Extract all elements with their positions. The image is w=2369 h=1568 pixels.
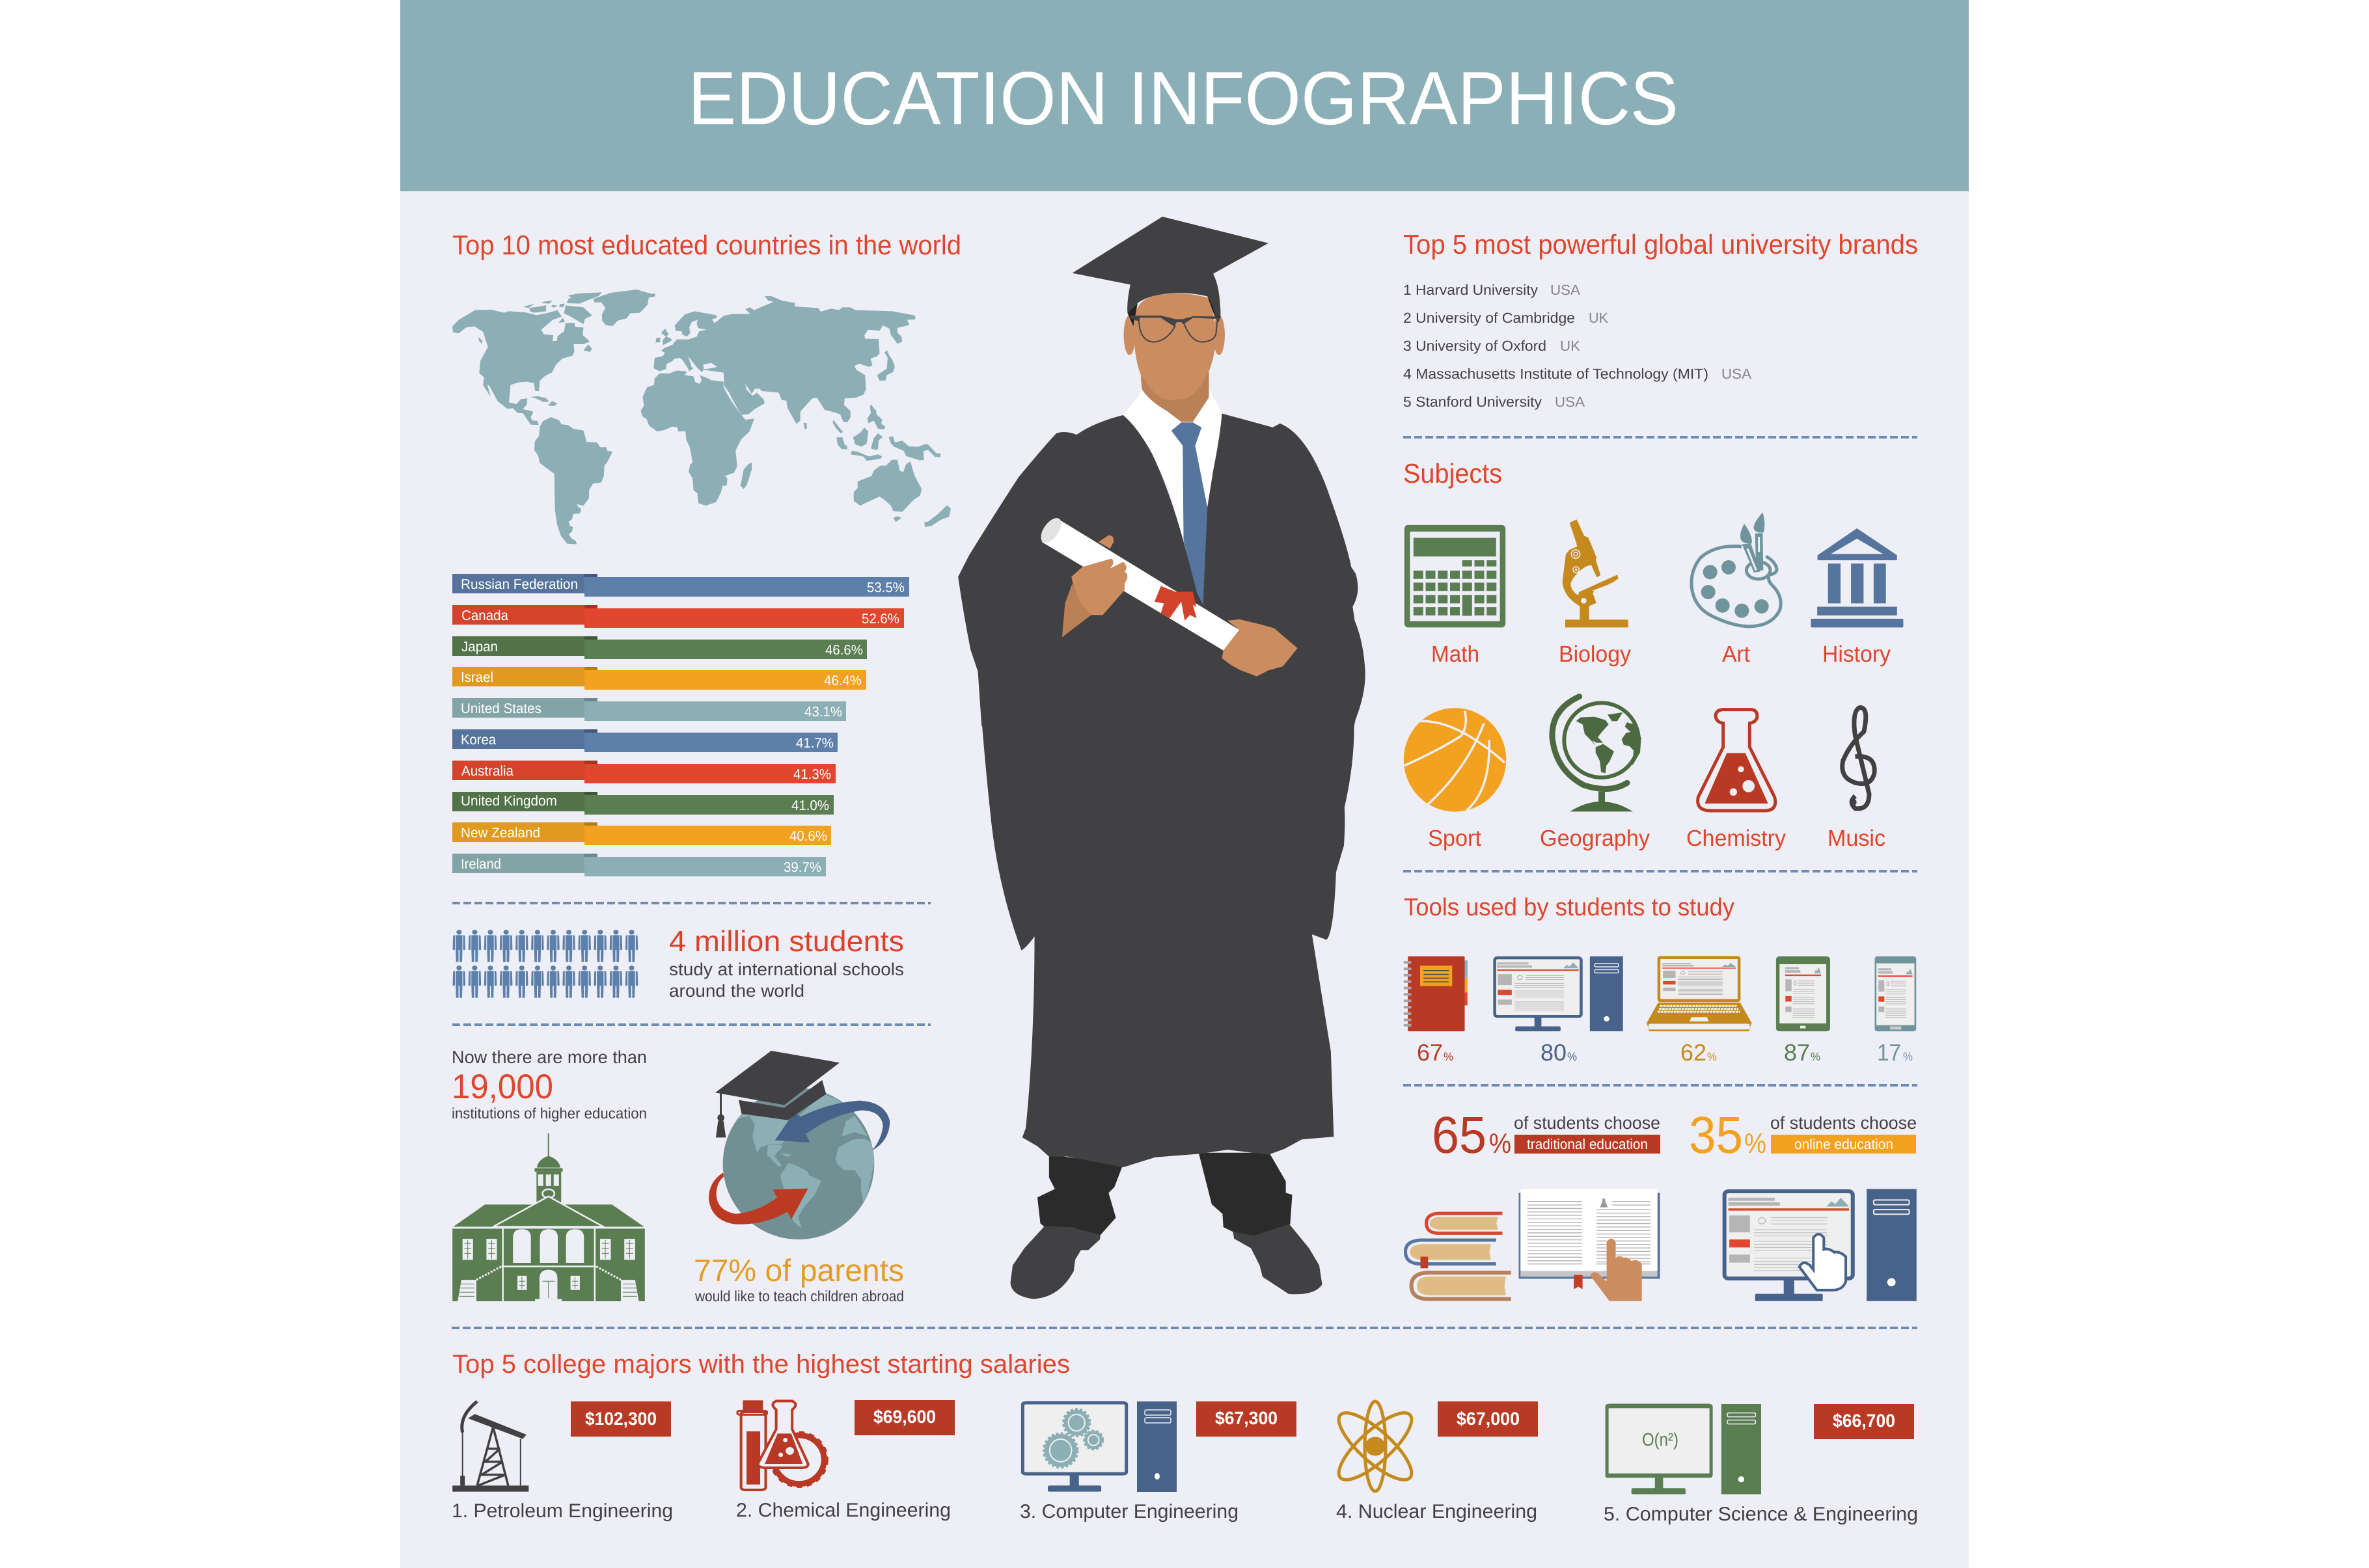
bar chart: education rates: Russian Federation xyxy=(461,576,578,592)
stat: 77% of parents: 77% of parents xyxy=(694,1254,904,1288)
icon: treble clef xyxy=(1842,707,1874,809)
bar chart: education rates: 41.0% xyxy=(791,798,829,813)
icon: computer with complexity formula: O(n²) xyxy=(1642,1429,1678,1450)
heading: top 10 countries: Top 10 most educated countries in the world xyxy=(452,230,961,260)
panel: traditional education xyxy=(1405,1106,1660,1301)
panel: top 5 university brands xyxy=(1403,229,1918,410)
stat: 67 percent notebook: % xyxy=(1444,1050,1453,1063)
stat: 17 percent phone: 17 xyxy=(1877,1039,1901,1066)
major names: 4. Nuclear Engineering xyxy=(1336,1501,1537,1522)
icon: notebook xyxy=(1404,956,1468,1031)
bar chart: education rates: 39.7% xyxy=(784,859,821,875)
panel: top 10 most educated countries xyxy=(452,230,961,876)
icon: calculator xyxy=(1404,525,1505,627)
salary tag 1: $102,300 xyxy=(585,1409,657,1429)
major names: 3. Computer Engineering xyxy=(1020,1501,1239,1522)
header banner xyxy=(400,0,1969,191)
bar chart: education rates: New Zealand xyxy=(461,825,540,841)
icon: microscope xyxy=(1563,519,1628,627)
stat: 80 percent desktop: 80 xyxy=(1541,1039,1567,1066)
stat: 35 percent: % xyxy=(1744,1128,1766,1159)
salary tag 2: $69,600 xyxy=(873,1407,936,1427)
salary tag 2 xyxy=(855,1400,955,1435)
ranked university list: 5 Stanford University xyxy=(1403,394,1542,410)
bar chart: education rates: 41.7% xyxy=(796,735,834,751)
tag: traditional education: traditional education xyxy=(1527,1136,1648,1152)
stat: 62 percent laptop: % xyxy=(1707,1050,1717,1063)
panel: institutions of higher education xyxy=(452,1048,647,1301)
bar chart: education rates: 52.6% xyxy=(862,611,899,627)
ranked university list: UK xyxy=(1560,338,1580,354)
icon: desktop computer xyxy=(1495,956,1623,1031)
salary tag 4: $67,000 xyxy=(1457,1409,1520,1429)
text: international schools xyxy=(669,960,904,1001)
bar chart: education rates: Canada xyxy=(461,608,508,623)
bar chart: education rates: 41.3% xyxy=(793,766,831,782)
icon: tablet xyxy=(1776,956,1830,1031)
subject labels: Chemistry xyxy=(1686,826,1786,851)
bar chart: education rates: Korea xyxy=(461,732,496,748)
bar chart: education rates: United Kingdom xyxy=(461,793,557,809)
icon: books and open book xyxy=(1405,1189,1660,1301)
ranked university list: USA xyxy=(1555,394,1585,410)
text: now there are more than: Now there are more than xyxy=(452,1048,647,1067)
tag: online education xyxy=(1771,1135,1916,1154)
icon: laptop xyxy=(1647,958,1751,1031)
ranked university list: 3 University of Oxford xyxy=(1403,338,1546,354)
icon: basketball xyxy=(1404,708,1506,812)
subject labels: Sport xyxy=(1428,826,1481,851)
stat: 65 percent: 65 xyxy=(1432,1106,1486,1164)
icon: atom xyxy=(1330,1401,1421,1491)
panel: 4 million students xyxy=(453,925,904,1001)
stat: 62 percent laptop: 62 xyxy=(1680,1039,1706,1066)
panel: top 5 college majors xyxy=(452,1350,1918,1525)
icon: computer with complexity formula xyxy=(1606,1404,1761,1494)
salary tag 1 xyxy=(571,1401,671,1437)
icon: chemistry glassware with gear xyxy=(737,1400,827,1490)
text: of students choose: of students choose xyxy=(1514,1113,1660,1133)
stat: 65 percent: % xyxy=(1489,1128,1511,1159)
icon: university building xyxy=(452,1133,645,1301)
subject labels: Math xyxy=(1431,642,1479,667)
page background panel xyxy=(400,0,1969,1568)
bar chart: education rates: 46.4% xyxy=(824,673,862,688)
major names: 5. Computer Science & Engineering xyxy=(1604,1504,1918,1525)
stat: 19,000: 19,000 xyxy=(452,1068,553,1106)
salary tag 4 xyxy=(1438,1401,1538,1437)
bar chart: education rates: 43.1% xyxy=(804,704,842,720)
stat: 87 percent tablet: 87 xyxy=(1784,1039,1810,1066)
icon: desk globe xyxy=(1552,697,1641,811)
salary tag 3: $67,300 xyxy=(1215,1408,1278,1428)
major names xyxy=(452,1500,1918,1525)
salary tag 5 xyxy=(1814,1404,1914,1439)
panel: tools used by students xyxy=(1404,894,1916,1066)
icon: computer with gears xyxy=(1022,1401,1177,1492)
icon: temple xyxy=(1811,528,1903,627)
icon: oil pump xyxy=(452,1401,528,1492)
title: EDUCATION INFOGRAPHICS xyxy=(688,56,1678,141)
ranked university list: 2 University of Cambridge xyxy=(1403,310,1575,326)
heading: subjects: Subjects xyxy=(1403,458,1502,489)
bar chart: education rates: Japan xyxy=(461,639,498,655)
salary tag 5: $66,700 xyxy=(1833,1411,1895,1431)
stat: 67 percent notebook: 67 xyxy=(1417,1039,1443,1066)
text: of students choose: of students choose xyxy=(1770,1113,1917,1133)
subject labels: Geography xyxy=(1540,826,1650,851)
subject labels xyxy=(1428,642,1891,851)
ranked university list: 4 Massachusetts Institute of Technology (MIT) xyxy=(1403,366,1708,382)
heading: tools: Tools used by students to study xyxy=(1404,894,1734,921)
bar chart: education rates: 40.6% xyxy=(789,828,827,844)
ranked university list: USA xyxy=(1721,366,1751,382)
bar chart: education rates: 46.6% xyxy=(825,642,863,658)
icon: computer with pointer hand xyxy=(1725,1189,1917,1301)
icon: smartphone xyxy=(1875,956,1916,1031)
bar chart: education rates: 53.5% xyxy=(867,580,905,595)
major names: 2. Chemical Engineering xyxy=(736,1500,951,1521)
ranked university list: USA xyxy=(1550,282,1580,298)
ranked university list xyxy=(1403,282,1751,410)
text: international schools: around the world xyxy=(669,981,804,1001)
subject labels: Art xyxy=(1722,642,1750,667)
panel: parents abroad xyxy=(694,1051,904,1304)
stat: 80 percent desktop: % xyxy=(1567,1050,1577,1063)
ranked university list: UK xyxy=(1589,310,1608,326)
bar chart: education rates: Israel xyxy=(461,669,493,685)
text: teach children abroad: would like to teach children abroad xyxy=(694,1288,904,1304)
stat: 35 percent: 35 xyxy=(1689,1106,1743,1164)
stat: 17 percent phone: % xyxy=(1903,1050,1913,1063)
icon: art palette xyxy=(1691,512,1781,627)
bar chart: education rates: Australia xyxy=(461,763,514,779)
tag: online education: online education xyxy=(1794,1136,1893,1152)
heading: university brands: Top 5 most powerful global university brands xyxy=(1403,229,1918,260)
panel: subjects xyxy=(1403,458,1903,851)
ranked university list: 1 Harvard University xyxy=(1403,282,1538,298)
subject labels: Music xyxy=(1828,826,1885,851)
illustration: graduate in gown xyxy=(958,217,1365,1299)
subject labels: History xyxy=(1822,642,1891,667)
panel: online education xyxy=(1689,1106,1917,1301)
stat: 87 percent tablet: % xyxy=(1811,1050,1820,1063)
bar chart: education rates: Ireland xyxy=(461,856,501,872)
world map xyxy=(452,290,951,545)
icon: graduation cap, globe and arrows xyxy=(709,1051,890,1239)
icon: rows of students xyxy=(453,930,638,998)
text: institutions: institutions of higher education xyxy=(452,1105,647,1122)
subject labels: Biology xyxy=(1559,642,1631,667)
salary tag 3 xyxy=(1196,1401,1296,1437)
heading: college majors: Top 5 college majors with the highest starting salaries xyxy=(452,1350,1070,1379)
bar chart: education rates: United States xyxy=(461,701,541,716)
bar chart: education rates xyxy=(452,574,909,876)
text: international schools: study at international schools xyxy=(669,960,904,979)
major names: 1. Petroleum Engineering xyxy=(452,1500,673,1522)
icon: chemistry flask xyxy=(1698,710,1775,811)
stat: 4 million students: 4 million students xyxy=(669,925,904,958)
